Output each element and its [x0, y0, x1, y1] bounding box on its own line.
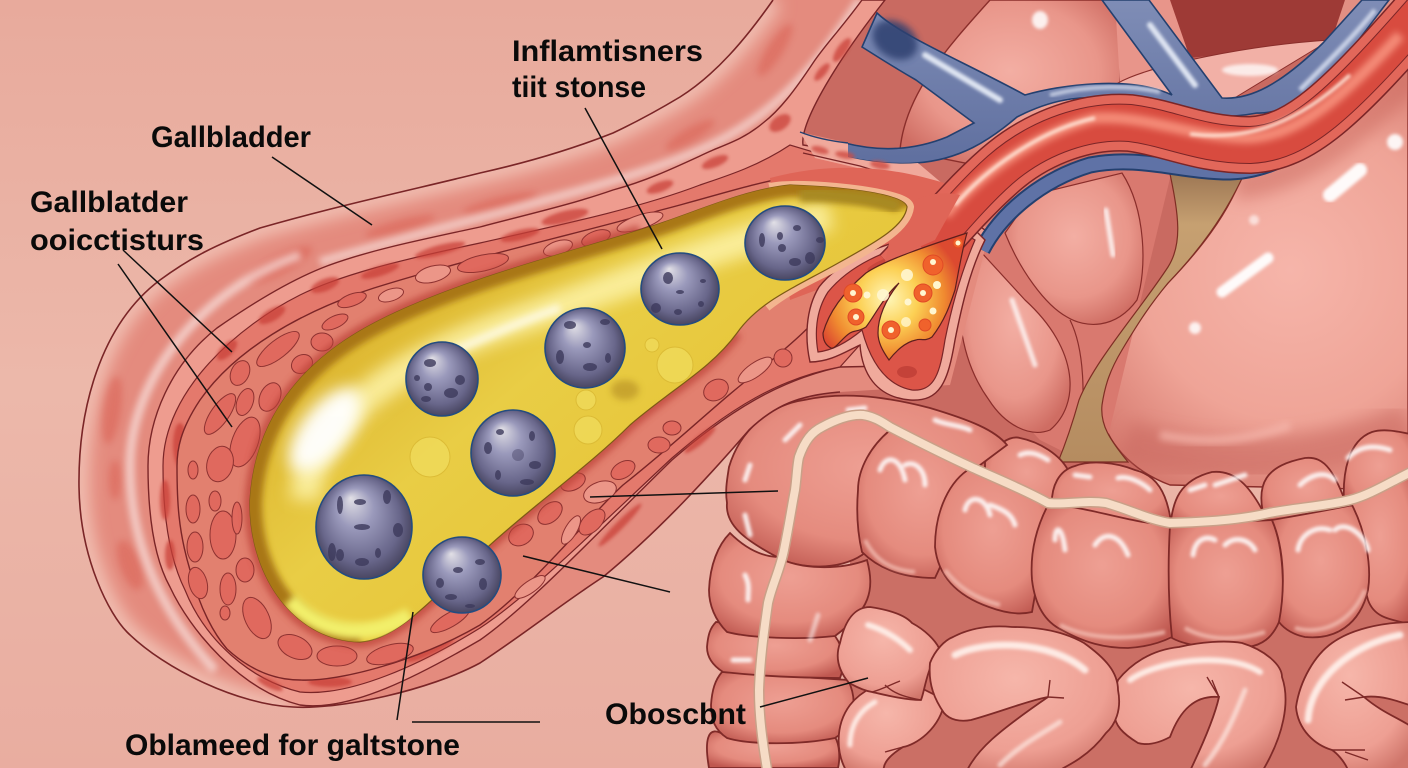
stone 2 — [423, 537, 501, 613]
label: Oboscbnt: Oboscbnt — [605, 698, 746, 731]
inflamed fold — [807, 215, 985, 400]
leader lines — [118, 108, 868, 722]
vein shading — [865, 10, 1375, 100]
stone 7 — [745, 206, 825, 280]
stone 4 — [406, 342, 478, 416]
mucosal layer — [177, 171, 901, 680]
bile bubbles — [410, 338, 693, 477]
upper vein — [845, 0, 1389, 164]
muscular wall layer — [148, 0, 985, 706]
upper haustra — [985, 430, 1408, 625]
label: Gallblatder ooicctisturs: Gallblatder — [30, 186, 188, 219]
bile — [250, 185, 907, 642]
label: Gallbladder: Gallbladder — [151, 121, 311, 154]
stone 3 — [471, 410, 555, 496]
label: Gallblatder ooicctisturs: ooicctisturs — [30, 224, 204, 257]
stomach shadow and highlights — [1125, 70, 1408, 458]
inflamed tissue — [823, 233, 967, 360]
lower vein — [982, 40, 1408, 250]
inner muscular band — [163, 145, 900, 693]
small bowel highlights — [850, 625, 1400, 765]
colon highlights — [733, 408, 1390, 660]
stone 6 — [641, 253, 719, 325]
label: Inflamtisners tiit stonse: tiit stonse — [512, 71, 646, 104]
small bowel loops — [838, 607, 1408, 768]
label: Gallblatder ooicctisturs — [30, 186, 204, 257]
colon band — [759, 415, 1408, 768]
pale strip below vein — [800, 132, 950, 192]
lower organ lobes — [960, 170, 1172, 470]
outer wall contour — [79, 0, 840, 707]
intestines — [707, 396, 1408, 768]
gallstones — [316, 206, 825, 613]
artery — [900, 8, 1408, 275]
upper organs backdrop — [790, 0, 1408, 470]
colon segments — [707, 396, 1408, 768]
small bowel fold lines — [872, 677, 1368, 760]
junction blend — [885, 193, 960, 262]
label: Oblameed for galtstone: Oblameed for galtstone — [125, 729, 460, 762]
stomach — [1102, 40, 1408, 490]
bile edge shading — [250, 188, 907, 642]
lower backdrop — [850, 545, 1408, 768]
stone 5 — [545, 308, 625, 388]
fat strip — [1058, 165, 1248, 462]
tissue cells — [185, 208, 792, 669]
outer wall layer — [79, 0, 990, 707]
stone 1 — [316, 475, 412, 579]
muscular wall blotches — [160, 36, 854, 694]
label: Inflamtisners tiit stonse: Inflamtisners — [512, 35, 703, 68]
neck tissue — [770, 168, 1000, 300]
outer wall shading and blotches — [79, 0, 860, 707]
gallbladder — [79, 0, 990, 707]
label: Inflamtisners tiit stonse — [512, 35, 703, 104]
